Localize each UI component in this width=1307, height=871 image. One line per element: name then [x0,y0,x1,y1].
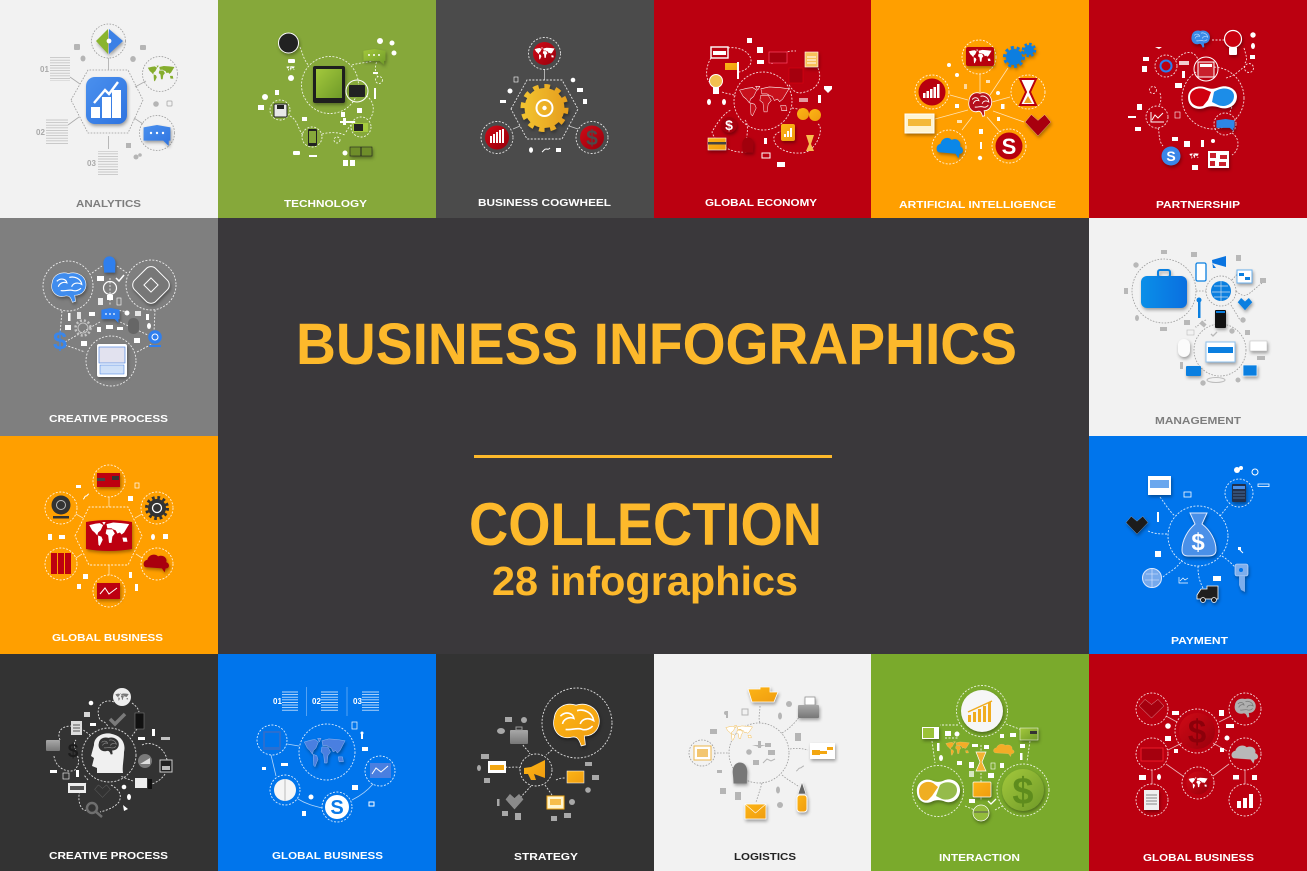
icon: brain [1142,568,1162,588]
icon: S circle [325,795,349,819]
icon: black heart [1126,516,1148,534]
icon: black phone [1215,310,1226,328]
icon: blue bubble [1216,119,1235,131]
icon: tablet [263,731,281,750]
icon: blue head [103,256,116,273]
icon: ship [748,687,778,702]
icon: green world map [148,66,174,81]
icon: orange paper [810,743,835,759]
text block 02: 02 [36,128,45,137]
icon: world circle [113,688,131,706]
icon: map paper [547,796,564,809]
icon: dollar: S [1002,134,1016,159]
icon: chart [1237,794,1253,808]
icon: yellow flag [725,62,739,79]
icon: grey briefcase [510,727,528,744]
icon: phone outline [1196,263,1206,281]
icon: printer [798,697,819,718]
text block 01: 01 [40,65,49,74]
label: global economy: GLOBAL ECONOMY [705,198,817,209]
icon: red cloud [144,555,169,572]
icon: blue key [1196,298,1202,318]
icon: dark gear [147,498,167,518]
panel: technology [218,0,436,218]
icon: chart [918,78,946,106]
icon: yellow card [708,138,726,150]
panel: logistics [654,654,871,871]
icon: partnership clouds [917,779,960,803]
icon: dollar [996,132,1022,160]
icon: blue folder [1186,366,1201,376]
icon: brain [969,93,992,116]
icon: hourglass [1020,79,1036,105]
icon: diamond [96,29,123,54]
subtitle: collection: COLLECTION [469,491,822,558]
icon: yellow chart tile [781,124,795,141]
icon: grey head [733,762,747,784]
icon: heart outline [95,785,110,797]
icon: partnership clouds [1188,86,1237,109]
icon: QR paper [1208,151,1229,168]
icon: blue brain [52,273,86,302]
panel: creative process dark [0,654,218,871]
icon: money bag: $ [1191,529,1205,556]
icon: grey cloud [1232,746,1258,763]
icon: megaphone [524,760,545,780]
icon: red chart [97,583,120,599]
icon: blue world [304,738,345,767]
icon: dollar circle [1002,769,1044,813]
icon: white mouse [1178,339,1190,357]
icon: brain white [274,779,296,801]
icon: chart circle [138,754,152,768]
icon: red doc [789,68,803,83]
panel: business cogwheel [436,0,654,218]
icon: analytics bar tile [86,77,127,124]
icon: tablet [922,727,939,739]
icon: megaphone [1212,256,1226,268]
icon: card [1020,728,1038,740]
icon: browser [68,783,86,793]
icon: orange rectangle [567,771,584,783]
icon: orange browser [488,761,506,773]
icon: head with brain [91,733,124,773]
icon: grey brain [1235,699,1256,718]
icon: browser [1206,342,1235,362]
central panel background [218,218,1089,654]
icon: truck [1197,586,1218,602]
text block 03: 03 [87,159,96,168]
panel: strategy [436,654,654,871]
icon: red world [533,42,556,65]
label: creative process: CREATIVE PROCESS [49,851,168,862]
icon: yellow document [805,52,818,67]
icon: orange map [726,726,752,740]
icon: speech bubble [144,125,170,146]
panel: artificial intelligence [871,0,1089,218]
icon: gears [797,108,821,121]
icon: world [1186,772,1210,794]
icon: cloud [937,138,963,158]
label: analytics: ANALYTICS [76,199,141,210]
icon: grey heart [506,794,523,809]
icon: dollar circle: $ [586,127,598,150]
text columns [273,687,379,716]
icon: calculator [1232,484,1246,502]
icon: red books [51,553,71,574]
icon: envelope circle [346,80,368,102]
icon: dollar circle: $ [725,117,733,133]
panel: global business blue [218,654,436,871]
icon: browser [711,47,728,58]
icon: gear outline [76,320,90,336]
icon: blue brain [1191,31,1210,48]
panel: payment [1089,436,1307,654]
text columns: 02 [312,697,321,706]
icon: dark head [742,137,754,153]
label: artificial intelligence: ARTIFICIAL INTELLIGENCE [899,200,1056,211]
icon: webcam [52,496,70,518]
text block 02 [36,119,68,144]
panel: global business orange [0,436,218,654]
icon: browser [905,114,934,133]
icon: blue monitor [1243,365,1257,376]
subtitle: 28 infographics: 28 infographics [492,558,798,604]
icon: heart [1139,699,1164,718]
panel: global economy [654,0,871,218]
icon: red world [86,520,132,551]
label: global business: GLOBAL BUSINESS [272,851,383,862]
panel: management [1089,218,1307,436]
icon: bulb [710,74,722,94]
label: technology: TECHNOLOGY [284,199,367,210]
icon: tablet [313,66,345,103]
icon: pen [797,782,807,812]
title: BUSINESS INFOGRAPHICS [296,312,1017,377]
icon: map paper [694,746,711,760]
icon: folder [46,740,60,751]
icon: S circle: S [330,797,344,819]
label: global business: GLOBAL BUSINESS [52,633,163,644]
icon: white monitor [1250,341,1267,351]
icon: world [966,47,994,66]
text block 03 [87,151,118,175]
label: interaction: INTERACTION [939,853,1020,864]
icon: big dollar circle: $ [1188,713,1206,750]
icon: document [71,721,82,735]
panel: partnership [1089,0,1307,218]
label: business cogwheel: BUSINESS COGWHEEL [478,198,611,209]
icon: big dollar circle [1179,713,1215,750]
icon: red laptop [1141,748,1163,761]
text columns: 03 [353,697,362,706]
divider line [474,455,832,458]
icon: blue dollar: $ [53,327,67,355]
label: partnership: PARTNERSHIP [1156,200,1240,211]
icon: device [353,123,368,132]
panel: analytics [0,0,218,218]
icon: chart tile [370,763,391,778]
icon: dark brain [278,33,298,53]
icon: orange brain [554,704,599,746]
icon: document [1144,790,1159,810]
icon: blue heart [1238,298,1252,310]
icon: orange maps [946,742,1014,757]
icon: widget [1237,270,1252,283]
icon: dollar circle: $ [1012,771,1034,813]
icon: browser [1148,476,1171,495]
icon: webcam [148,330,162,347]
label: global business: GLOBAL BUSINESS [1143,853,1254,864]
icon: key [1235,564,1248,592]
panel: interaction [871,654,1089,871]
panel: creative process grey [0,218,218,436]
icon: blue brain [1211,281,1231,301]
icon: bulb [104,282,116,300]
icon: green book [350,147,372,156]
icon: mouse [128,318,139,334]
icon: chart [1151,112,1164,122]
icon: dollar circle [580,126,604,150]
icon: briefcase [1141,270,1187,308]
icon: calculator [1194,57,1218,81]
label: creative process: CREATIVE PROCESS [49,414,168,425]
icon: chart circle [961,690,1003,732]
icon: green badge [973,805,989,821]
icon: dark dollar: $ [68,741,79,762]
icon: red envelope [769,52,787,63]
label: management: MANAGEMENT [1155,416,1242,427]
icon: floppy [274,104,287,117]
icon: blue S: S [1166,148,1176,164]
label: payment: PAYMENT [1171,636,1229,647]
icon: bars circle [485,126,509,150]
icon: money bag [1182,513,1216,556]
label: logistics: LOGISTICS [734,852,796,863]
text block 01 [40,57,70,81]
icon: blue bubble [101,308,120,323]
icon: dark phone [135,713,144,729]
icon: hourglass [806,135,814,151]
icon: blue S [1162,146,1180,166]
icon: green bubble [363,49,386,65]
icon: red bulb [1224,30,1242,55]
icon: grey diamond [130,264,172,306]
icon: orange wallet [973,782,991,797]
icon: stopwatch [1160,60,1172,72]
icon: red card [97,473,120,487]
icon: floppy [160,760,172,772]
icon: white tablet [135,778,152,789]
icon: white tablet [97,344,127,377]
text columns: 01 [273,697,282,706]
icon: phone [308,129,317,146]
icon: check [110,714,125,724]
panel: global business red [1089,654,1307,871]
icon: hourglass [976,752,986,771]
icon: outlined world [740,86,789,116]
icon: dollar circle [721,117,737,133]
icon: blue gears [1004,44,1035,66]
icon: key [87,803,102,817]
icon: heart [1025,115,1051,136]
icon: envelope [745,804,766,819]
label: strategy: STRATEGY [514,852,578,863]
icon: gear [524,88,565,128]
